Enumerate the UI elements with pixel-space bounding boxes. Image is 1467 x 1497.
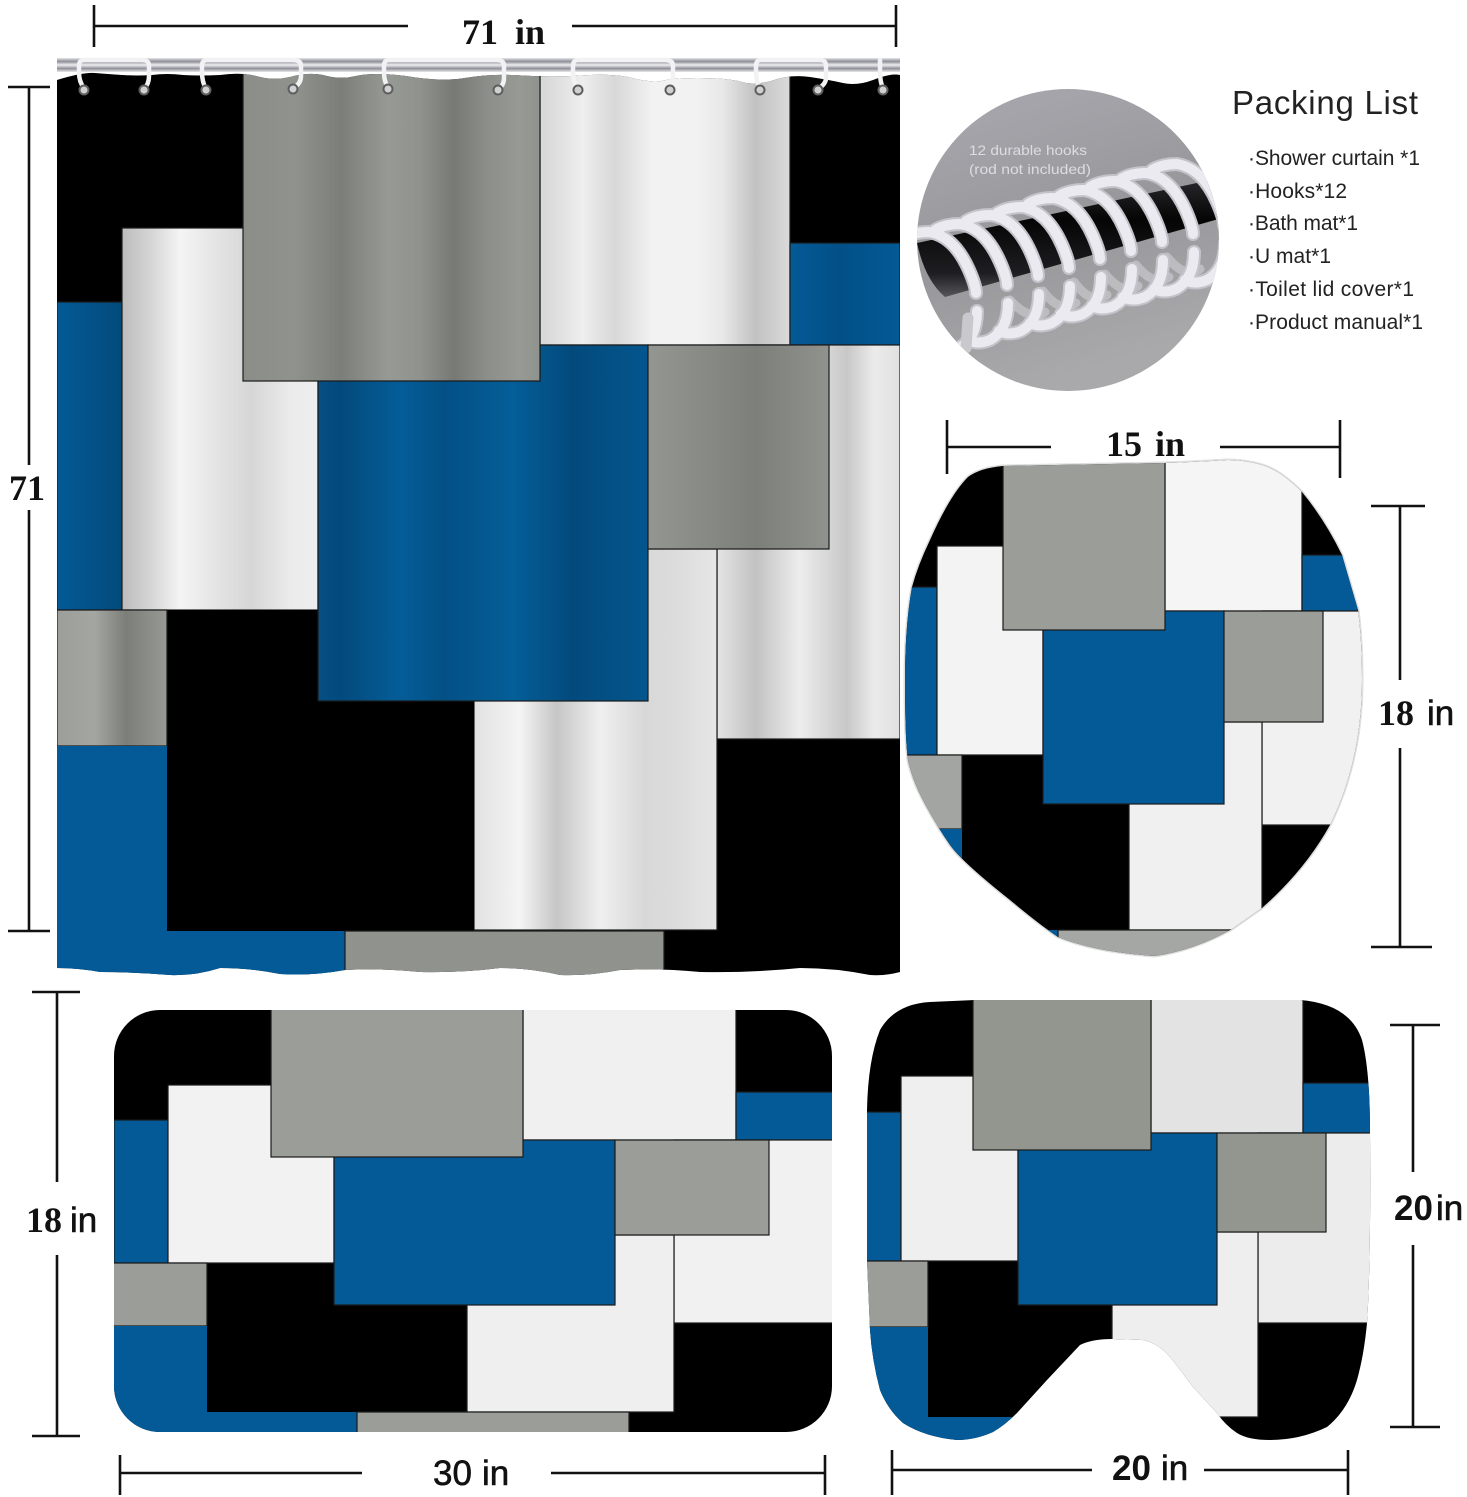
packing list items: ·U mat*1 xyxy=(1248,245,1331,268)
dimension: bath mat height 18 in: 18 xyxy=(26,1200,62,1240)
dimension: bath mat width 30 in: in xyxy=(482,1454,509,1493)
hooks note: 12 durable hooks xyxy=(969,142,1087,158)
curtain rod xyxy=(57,58,900,72)
dimension: lid width 15 in xyxy=(947,420,1340,478)
dimension: U mat height 20 in: 20 xyxy=(1394,1189,1433,1228)
packing list items: ·Product manual*1 xyxy=(1248,311,1423,334)
panel: bath mat xyxy=(112,1005,836,1436)
dimension: lid width 15 in: in xyxy=(1155,424,1185,464)
dimension: lid height 18 in: in xyxy=(1427,694,1454,733)
white shower rings xyxy=(904,164,1225,350)
dimension: bath mat height 18 in: in xyxy=(70,1201,97,1240)
panel: toilet lid cover xyxy=(900,455,1370,960)
panel: shower curtain xyxy=(57,70,900,986)
curtain hooks xyxy=(79,60,888,94)
dimension: curtain width 71 in: in xyxy=(515,12,545,52)
packing list items xyxy=(1248,147,1423,334)
packing list items: ·Shower curtain *1 xyxy=(1248,147,1420,170)
packing list items: ·Toilet lid cover*1 xyxy=(1248,278,1414,301)
dimension: curtain width 71 in xyxy=(94,5,896,52)
dimension: bath mat width 30 in xyxy=(120,1454,825,1495)
dimension: curtain height 71 in xyxy=(8,87,50,931)
panel: U mat xyxy=(860,995,1375,1445)
dimension: lid width 15 in: 15 xyxy=(1106,424,1142,464)
dimension: curtain height 71 in: 71 xyxy=(9,468,45,508)
dimension: lid height 18 in: 18 xyxy=(1378,693,1414,733)
dimension: U mat width 20 in: in xyxy=(1161,1449,1188,1488)
dimension: U mat width 20 in: 20 xyxy=(1112,1449,1151,1488)
packing list heading: Packing List xyxy=(1232,84,1418,121)
dimension: bath mat width 30 in: 30 xyxy=(433,1454,472,1493)
packing list items: ·Hooks*12 xyxy=(1248,180,1347,203)
dimension: U mat width 20 in xyxy=(892,1449,1348,1495)
dimension: U mat height 20 in xyxy=(1390,1025,1463,1427)
hooks note: (rod not included) xyxy=(969,161,1091,177)
dimension: bath mat height 18 in xyxy=(26,992,97,1436)
dimension: U mat height 20 in: in xyxy=(1436,1189,1463,1228)
packing list items: ·Bath mat*1 xyxy=(1248,212,1358,235)
curtain rod in photo xyxy=(917,178,1222,297)
dimension: lid height 18 in xyxy=(1371,506,1454,947)
photo: 12 durable hooks xyxy=(904,88,1225,394)
hooks note xyxy=(970,145,1090,177)
dimension: curtain width 71 in: 71 xyxy=(462,12,498,52)
